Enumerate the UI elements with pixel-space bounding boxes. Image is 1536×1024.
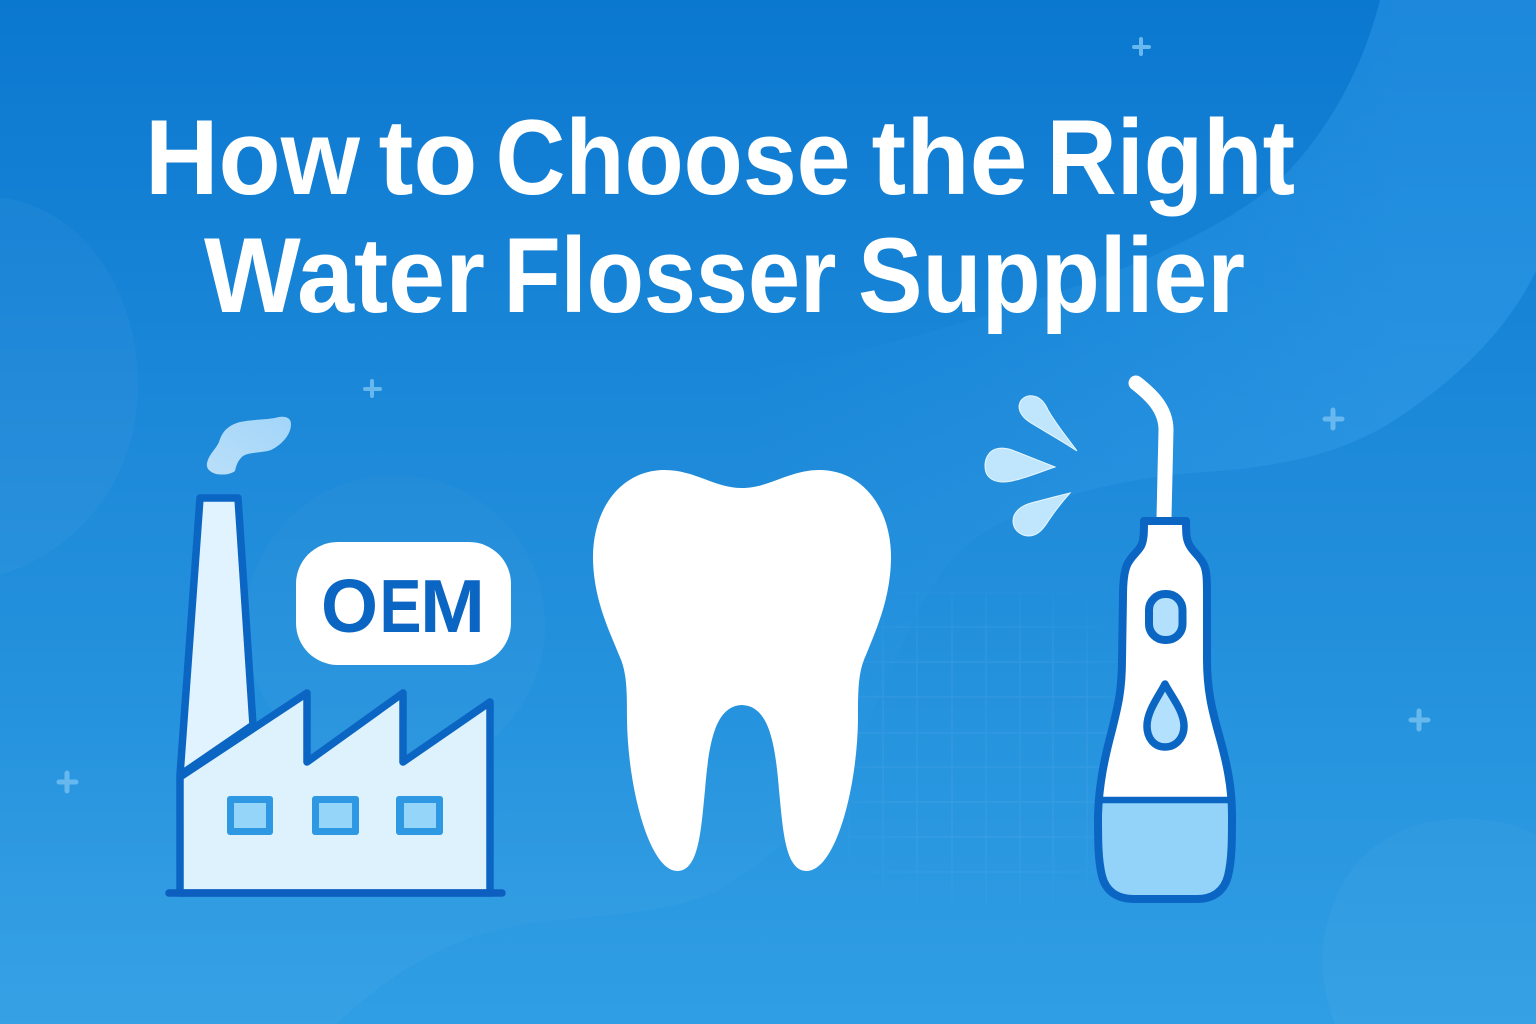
factory building	[180, 693, 490, 893]
nozzle	[1136, 383, 1166, 518]
OEM label: E	[380, 564, 422, 648]
OEM label: M	[420, 564, 485, 648]
title: Right	[1046, 97, 1295, 217]
title: How	[145, 97, 361, 217]
ground line	[169, 889, 502, 897]
icon: tooth	[593, 470, 891, 871]
icon: water flosser	[985, 383, 1232, 899]
power button	[1149, 594, 1182, 640]
title: to	[378, 97, 478, 217]
chimney	[180, 498, 253, 775]
OEM badge	[296, 542, 511, 665]
title: Supplier	[858, 215, 1245, 335]
water droplets	[985, 396, 1077, 536]
handle outline	[1098, 521, 1232, 899]
title: Choose	[496, 97, 850, 217]
reservoir divider	[1099, 797, 1231, 803]
title: the	[872, 97, 1028, 217]
icon: factory with OEM badge	[169, 417, 511, 893]
OEM label: O	[321, 564, 378, 648]
water drop button	[1147, 684, 1184, 747]
windows	[227, 796, 443, 835]
title	[145, 97, 1295, 335]
water reservoir	[1098, 800, 1232, 899]
title: Water	[204, 215, 485, 335]
icon: smoke	[207, 417, 291, 475]
title: Flosser	[504, 215, 836, 335]
handle fill	[1098, 521, 1232, 899]
decorative sparkles	[59, 39, 1428, 791]
